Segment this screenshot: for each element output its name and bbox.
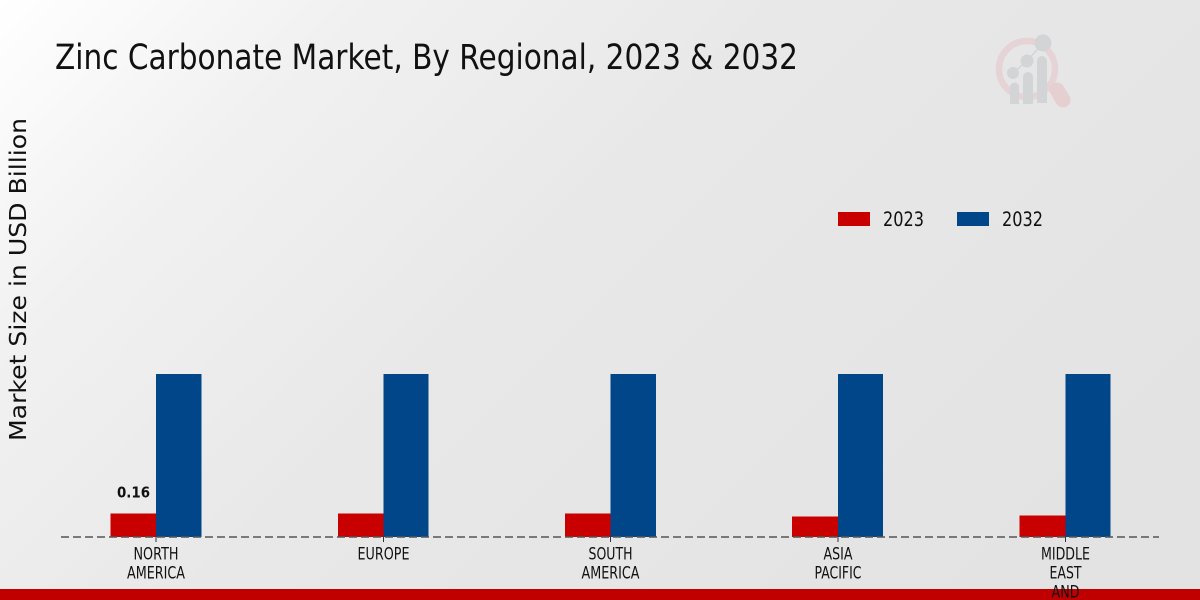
- label: Europe: EUROPE: [358, 544, 410, 564]
- legend item: 2023: 2023: [883, 208, 924, 231]
- bars: South America: [565, 374, 656, 537]
- data label: 0.16: 0.16: [117, 484, 150, 502]
- y axis label: Market Size in USD Billion: [6, 118, 32, 441]
- label: South America: SOUTH: [588, 544, 632, 564]
- label: North America: [127, 544, 186, 582]
- label: Asia Pacific: PACIFIC: [814, 564, 862, 582]
- legend item: 2032: 2032: [1002, 208, 1043, 231]
- label: North America: NORTH: [134, 544, 178, 564]
- bars: Middle East and Africa: [1020, 374, 1110, 537]
- legend item: 2023: [838, 208, 924, 231]
- label: Middle East and Africa: MIDDLE: [1041, 544, 1090, 564]
- bars: Asia Pacific: [792, 374, 883, 537]
- legend item: 2032: [957, 208, 1043, 231]
- label: Asia Pacific: ASIA: [824, 544, 853, 564]
- label: Middle East and Africa: [1041, 544, 1090, 600]
- title: Zinc Carbonate Market, By Regional, 2023 & 2032: [55, 38, 798, 78]
- label: Middle East and Africa: EAST: [1050, 564, 1082, 582]
- bar chart: [61, 374, 1159, 542]
- bars: North America: [110, 374, 202, 537]
- label: South America: AMERICA: [582, 564, 640, 582]
- label: South America: [582, 544, 640, 582]
- label: Asia Pacific: [814, 544, 862, 582]
- bars: Europe: [338, 374, 428, 537]
- icon: watermark logo: [999, 34, 1063, 104]
- label: North America: AMERICA: [127, 564, 186, 582]
- baseline: [61, 536, 1159, 538]
- legend: [838, 208, 1043, 231]
- footer bar: [0, 589, 1200, 600]
- category labels: [127, 544, 1090, 600]
